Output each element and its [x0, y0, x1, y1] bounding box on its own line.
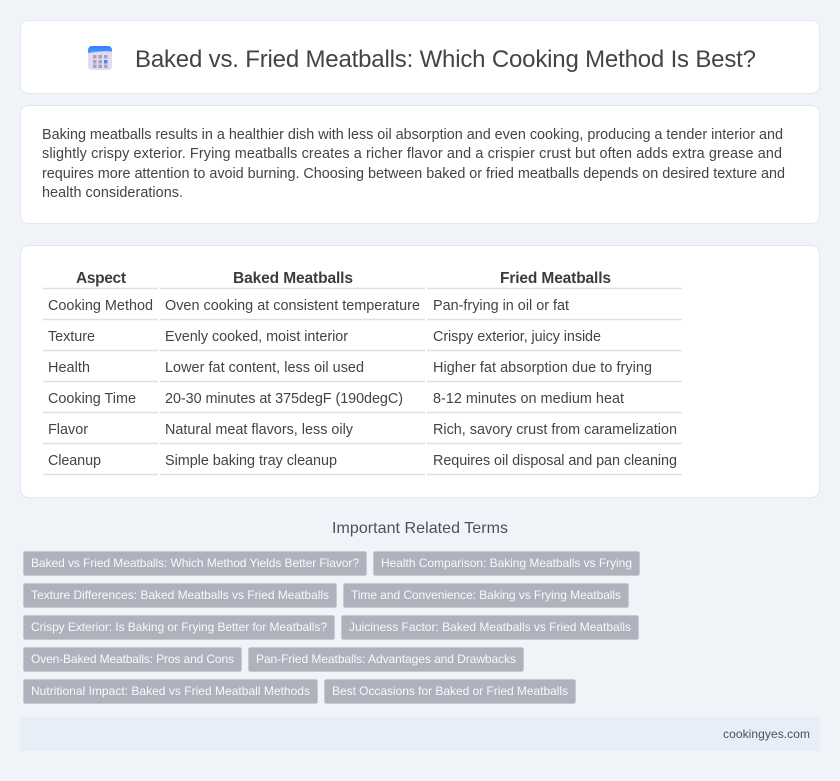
row: cleanup: Requires oil disposal and pan cleaning [433, 453, 677, 469]
row: cleanup: Cleanup [48, 453, 101, 469]
row: flavor: Flavor [48, 422, 88, 438]
row: cooking time: 8-12 minutes on medium heat [433, 391, 624, 407]
heading: related terms: Important Related Terms [332, 520, 508, 537]
tag [248, 648, 524, 672]
tag [374, 552, 640, 576]
row: texture: Evenly cooked, moist interior [165, 329, 348, 345]
row: flavor: Rich, savory crust from caramelization [433, 422, 677, 438]
tag [24, 616, 334, 640]
tag [344, 584, 628, 608]
tag: Baked vs Fried Meatballs: Which Method Yields Better Flavor? [31, 556, 359, 570]
row: cooking method [48, 298, 569, 314]
row: texture: Texture [48, 329, 95, 345]
tag [24, 584, 336, 608]
tag [324, 680, 576, 704]
panel: summary paragraph: slightly crispy exterior. Frying meatballs creates a richer flavor and a crispier crust but often adds extra grease and [42, 146, 782, 162]
row: texture: Crispy exterior, juicy inside [433, 329, 601, 345]
table header: Baked Meatballs [233, 270, 353, 287]
row: cooking method: Cooking Method [48, 298, 153, 314]
row: health: Health [48, 360, 90, 376]
footer bar: cookingyes.com [723, 727, 810, 741]
tag: Texture Differences: Baked Meatballs vs Fried Meatballs [31, 588, 329, 602]
row: cooking time: Cooking Time [48, 391, 136, 407]
row: cooking time: 20-30 minutes at 375degF (190degC) [165, 391, 403, 407]
panel: summary paragraph: requires more attention to avoid burning. Choosing between baked or fried meatballs depends on desired texture and [42, 166, 785, 182]
tag [24, 680, 318, 704]
row: cooking time [48, 391, 624, 407]
footer bar [20, 717, 820, 751]
title: Baked vs. Fried Meatballs: Which Cooking Method Is Best? [135, 46, 756, 73]
table header [76, 270, 611, 287]
related term tags [24, 552, 640, 704]
panel: summary paragraph: health considerations. [42, 185, 183, 201]
tag: Crispy Exterior: Is Baking or Frying Better for Meatballs? [31, 620, 327, 634]
row: cleanup [48, 453, 677, 469]
tag [24, 648, 242, 672]
tag [342, 616, 638, 640]
tag: Juiciness Factor: Baked Meatballs vs Fried Meatballs [349, 620, 631, 634]
row: texture [48, 329, 601, 345]
row: cooking method: Oven cooking at consistent temperature [165, 298, 420, 314]
tag: Nutritional Impact: Baked vs Fried Meatball Methods [31, 684, 310, 698]
tag: Pan-Fried Meatballs: Advantages and Drawbacks [256, 652, 516, 666]
tag: Time and Convenience: Baking vs Frying Meatballs [351, 588, 621, 602]
tag [24, 552, 366, 576]
table header: Fried Meatballs [500, 270, 611, 287]
panel: summary paragraph: Baking meatballs results in a healthier dish with less oil absorption and even cooking, producing a tender interior and [42, 127, 783, 143]
tag: Oven-Baked Meatballs: Pros and Cons [31, 652, 234, 666]
row: health: Higher fat absorption due to frying [433, 360, 652, 376]
header panel [20, 20, 820, 94]
icon: calendar [88, 46, 112, 70]
row: flavor [48, 422, 677, 438]
row: cleanup: Simple baking tray cleanup [165, 453, 337, 469]
row: cooking method: Pan-frying in oil or fat [433, 298, 569, 314]
row: health [48, 360, 652, 376]
tag: Best Occasions for Baked or Fried Meatballs [332, 684, 568, 698]
row: flavor: Natural meat flavors, less oily [165, 422, 354, 438]
panel: comparison table [20, 246, 820, 498]
panel: summary paragraph [20, 106, 820, 224]
table header: Aspect [76, 270, 126, 287]
row: health: Lower fat content, less oil used [165, 360, 364, 376]
tag: Health Comparison: Baking Meatballs vs Frying [381, 556, 632, 570]
